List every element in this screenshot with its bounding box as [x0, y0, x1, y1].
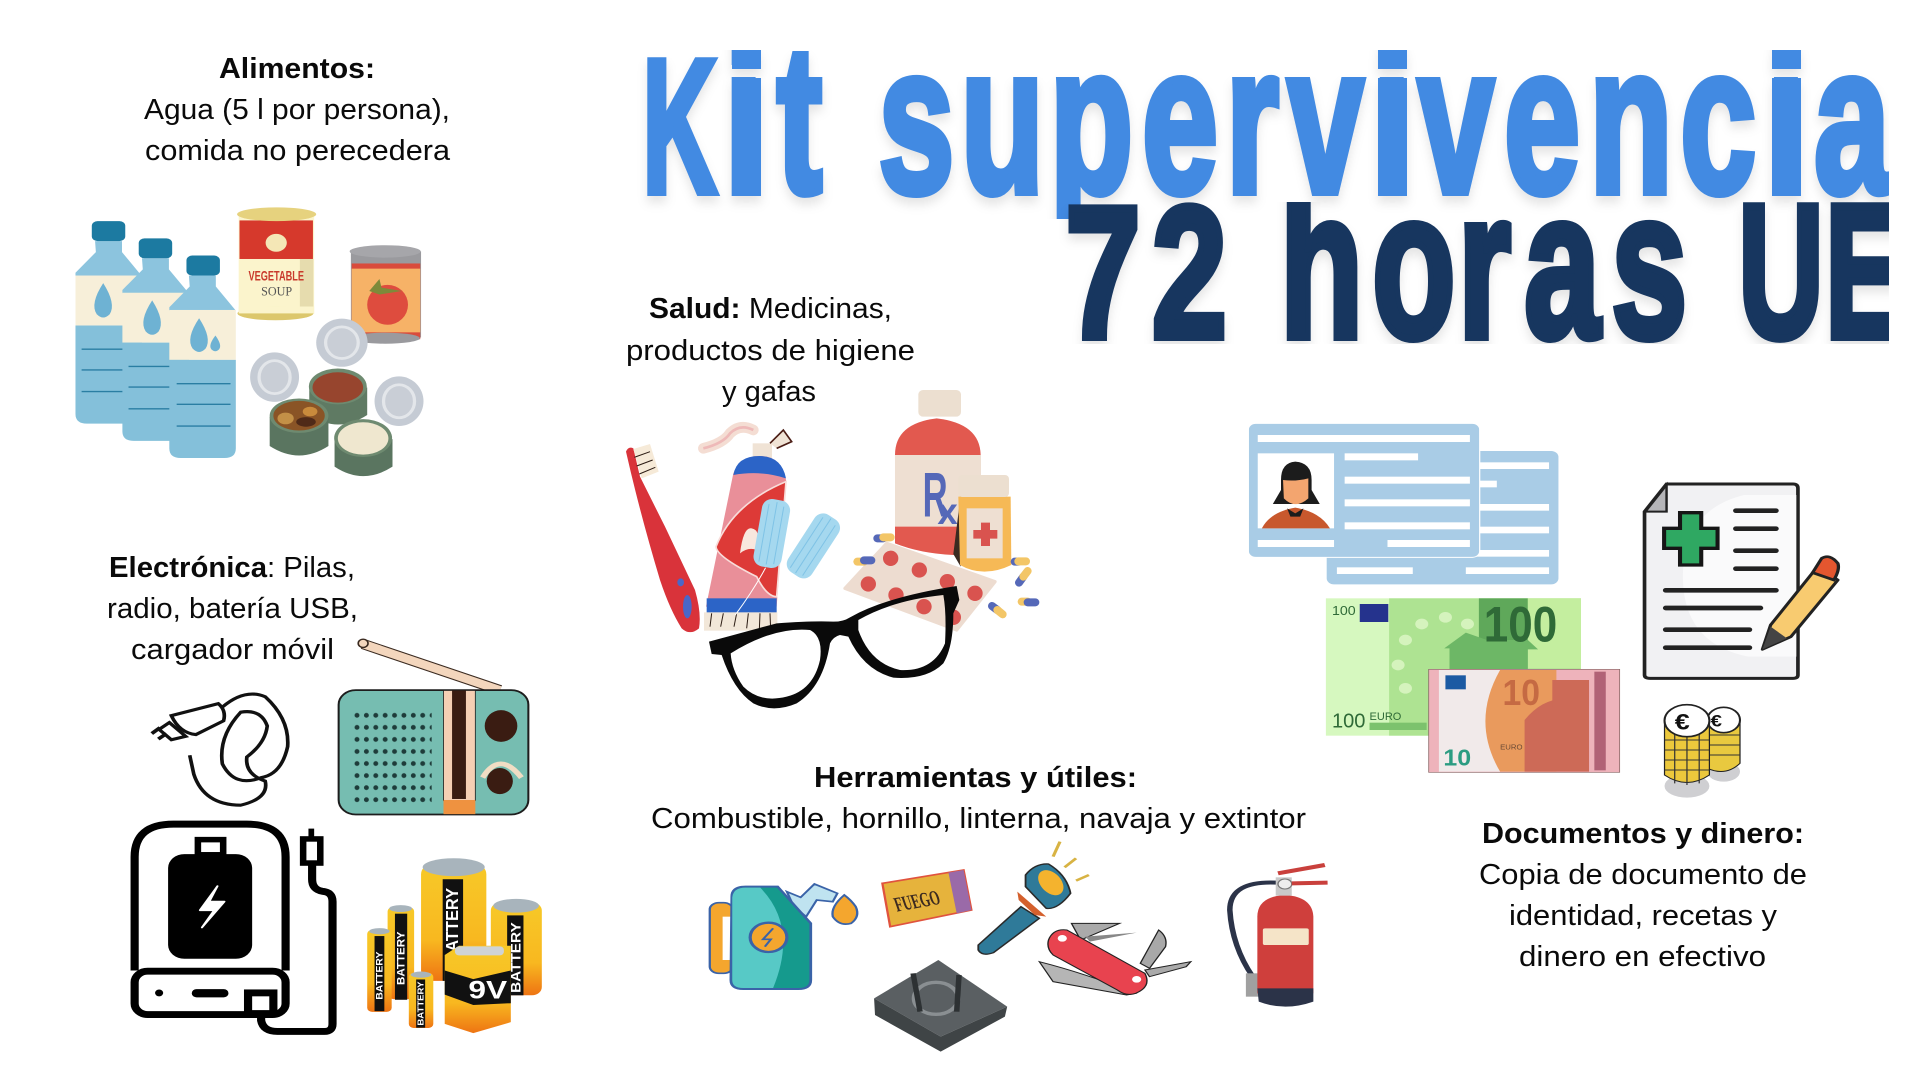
title: Kit supervivencia: it supervivencia [725, 2, 1891, 237]
icon: open cans [250, 319, 424, 476]
illustration: electronics [135, 639, 542, 1033]
icon: batteries: BATTERY [416, 982, 426, 1026]
icon: 10 euro note: EURO [1500, 742, 1523, 751]
icon: batteries: BATTERY [508, 922, 524, 993]
icon: gas stove [874, 960, 1007, 1052]
icon: small pill bottle [953, 475, 1011, 572]
text: Herramientas: Combustible, hornillo, linterna, navaja y extintor [651, 803, 1306, 835]
text: Salud: y gafas [722, 376, 816, 408]
text: Documentos [1479, 818, 1807, 973]
title: 72 horas UE: horas [1280, 147, 1687, 382]
icon: water bottle 3 [169, 256, 236, 458]
icon: water bottle 2 [122, 238, 189, 441]
icon: toothbrush [626, 444, 700, 632]
icon: 10 euro note: 10 [1503, 673, 1540, 713]
icon: tampons [735, 496, 844, 621]
icon: medical prescription document [1645, 484, 1798, 678]
icon: batteries: BATTERY [374, 951, 385, 1000]
icon: batteries: 9V [468, 976, 507, 1004]
icon: radio [339, 639, 528, 814]
text: Alimentos [144, 53, 451, 167]
text: Salud [626, 293, 915, 408]
icon: 100 euro note: 100 [1332, 604, 1356, 619]
title: 72 horas UE [1066, 202, 1889, 344]
icon: 100 euro note [1326, 596, 1581, 736]
icon: front of ID card [1248, 423, 1480, 557]
icon: phone charger [152, 694, 288, 805]
title: 72 horas UE: 72 [1066, 168, 1227, 377]
illustration: food and water [75, 207, 424, 476]
icon: tomato can [350, 245, 421, 344]
icon: flashlight [978, 842, 1089, 954]
text: Documentos: identidad, recetas y [1509, 900, 1778, 932]
icon: fuel can [710, 884, 857, 989]
text: Electrónica: cargador móvil [131, 634, 334, 666]
icon: 10 euro note: 10 [1443, 744, 1471, 771]
icon: fire extinguisher [1230, 865, 1328, 1007]
icon: euro coins: € [1711, 711, 1723, 730]
icon: batteries: BATTERY [442, 888, 462, 964]
icon: pocket knife [1039, 923, 1191, 995]
icon: water bottle 1 [75, 221, 142, 424]
text: Alimentos: Agua (5 l por persona), [144, 94, 450, 126]
icon: blister pack and pills [845, 537, 1035, 630]
text: Salud: productos de higiene [626, 335, 915, 367]
text: Electrónica: Electrónica: Pilas, [109, 552, 355, 584]
icon: batteries: BATTERY [396, 931, 408, 985]
icon: 10 euro note [1429, 669, 1620, 772]
icon: prescription bottle: R [923, 461, 948, 531]
icon: euro coins [1665, 705, 1740, 798]
icon: 100 euro note: EURO [1370, 710, 1401, 723]
illustration: tools [710, 842, 1328, 1052]
icon: 100 euro note: 100 [1332, 709, 1365, 732]
icon: 100 euro note: 100 [1484, 596, 1557, 652]
icon: vegetable soup can: VEGETABLE [248, 269, 304, 284]
title: Kit supervivencia: K [643, 22, 717, 233]
text: Salud: Salud: Medicinas, [649, 293, 892, 325]
text: Documentos: dinero en efectivo [1519, 941, 1766, 973]
icon: vegetable soup can: SOUP [261, 285, 293, 298]
icon: power bank [135, 824, 333, 1031]
icon: back of ID card [1327, 451, 1558, 584]
icon: matchbox: FUEGO [891, 887, 943, 917]
text: Herramientas [651, 762, 1306, 835]
icon: prescription bottle: x [937, 491, 958, 532]
title: Kit supervivencia [645, 50, 1889, 219]
icon: matchbox [882, 870, 971, 927]
title: 72 horas UE: UE [1738, 166, 1904, 378]
icon: pencil [1762, 557, 1838, 649]
icon: toothpaste [703, 427, 792, 631]
text: Alimentos: Alimentos: [219, 53, 375, 85]
icon: vegetable soup can [237, 207, 316, 320]
text: Electrónica: radio, batería USB, [107, 593, 358, 625]
text: Electrónica [107, 552, 358, 666]
icon: euro coins: € [1675, 711, 1690, 735]
illustration: health items [626, 390, 1035, 708]
text: Documentos: Copia de documento de [1479, 859, 1807, 891]
text: Alimentos: comida no perecedera [145, 135, 451, 167]
text: Herramientas: Herramientas y útiles: [814, 762, 1137, 794]
icon: prescription bottle [895, 390, 981, 555]
icon: glasses [709, 586, 959, 708]
illustration: documents and money [1248, 423, 1838, 798]
text: Documentos: Documentos y dinero: [1482, 818, 1804, 850]
icon: batteries [367, 858, 542, 1033]
